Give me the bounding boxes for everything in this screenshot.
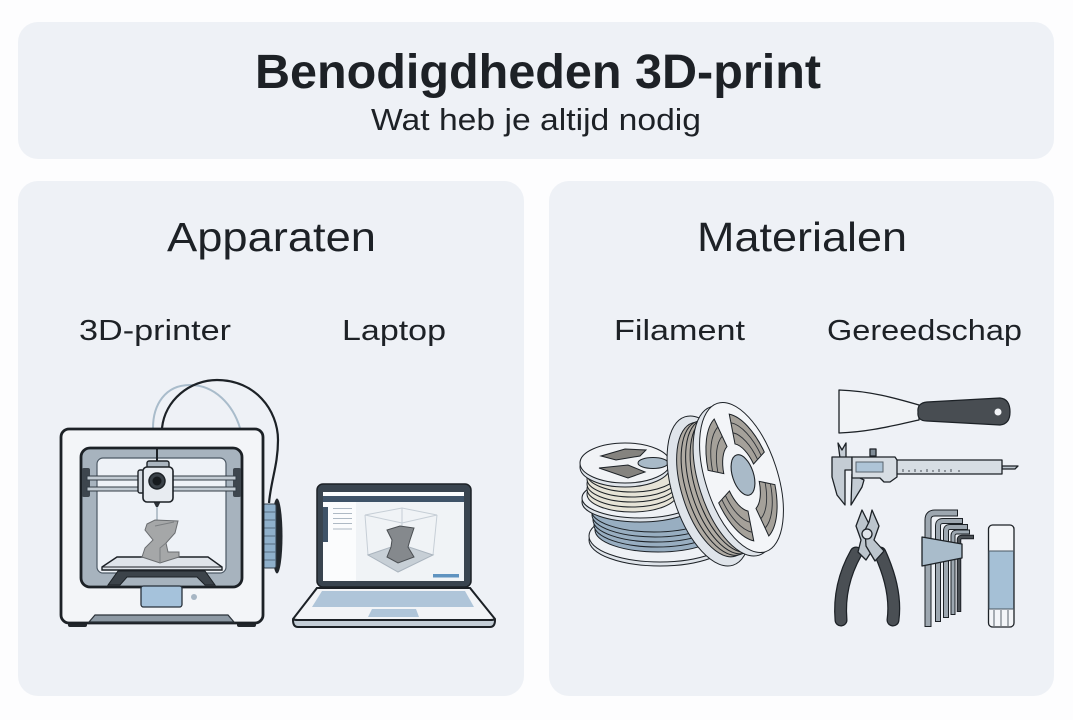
icon: filament spools	[580, 392, 800, 576]
subtitle: Wat heb je altijd nodig	[371, 102, 701, 137]
label: laptop: Laptop	[342, 315, 446, 347]
icon: glue stick	[988, 525, 1014, 627]
heading: apparaten: Apparaten	[167, 214, 376, 260]
icon: 3D printer	[61, 380, 282, 627]
label: filament: Filament	[614, 315, 745, 347]
heading: materialen: Materialen	[697, 214, 907, 260]
panel: apparaten	[18, 181, 524, 696]
icon: scraper	[839, 390, 1010, 433]
icon: laptop	[293, 484, 495, 627]
icon: pliers	[841, 510, 894, 620]
title: Benodigdheden 3D-print	[255, 46, 821, 99]
icon: allen keys	[922, 513, 974, 627]
label: 3D-printer: 3D-printer	[79, 315, 232, 347]
panel: header	[18, 22, 1054, 159]
label: gereedschap: Gereedschap	[827, 315, 1022, 347]
panel: materialen	[549, 181, 1054, 696]
icon: caliper	[832, 443, 1018, 505]
